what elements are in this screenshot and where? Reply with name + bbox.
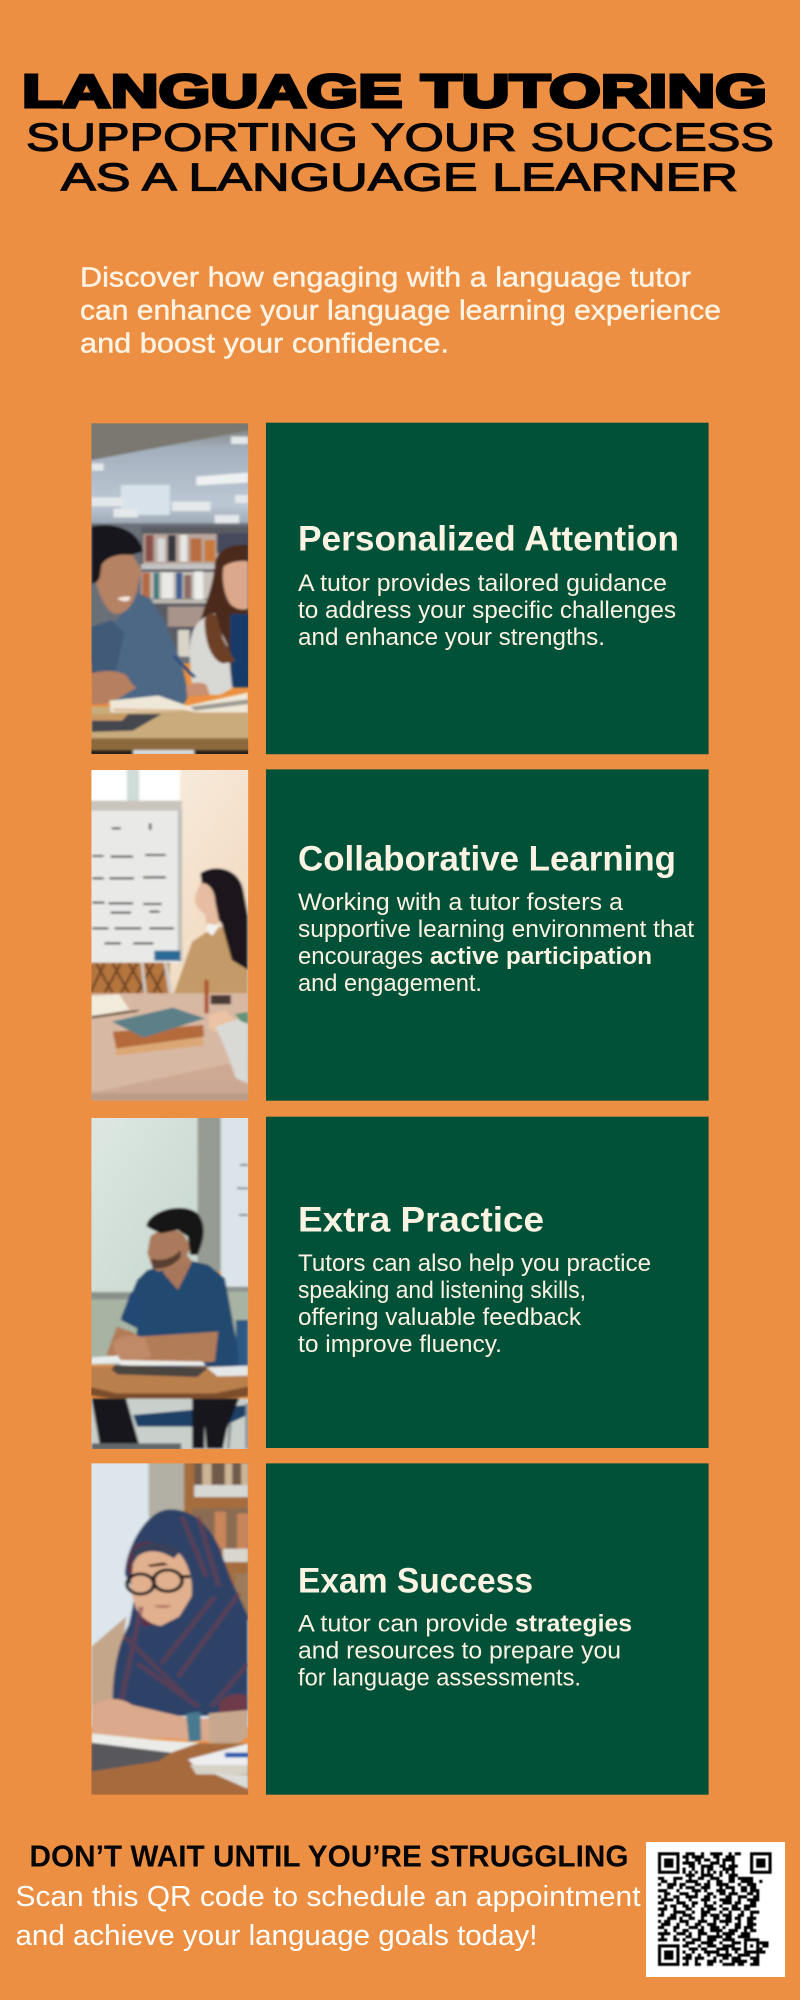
woman — [174, 927, 248, 993]
sweater — [91, 1617, 126, 1710]
books — [115, 1035, 204, 1056]
plaid stripes — [121, 1517, 248, 1707]
photo: man at table — [88, 1115, 251, 1450]
body text: A tutor provides tailored guidance — [298, 570, 667, 597]
panel: extra practice — [266, 1117, 709, 1448]
body text: to improve fluency. — [298, 1331, 502, 1358]
intro text — [80, 262, 721, 358]
body text — [298, 1610, 632, 1692]
table — [92, 1364, 248, 1394]
body text: encourages — [298, 943, 423, 970]
body text: and enhance your strengths. — [298, 624, 605, 651]
body text: A tutor can provide — [298, 1610, 508, 1638]
body text: supportive learning environment that — [298, 916, 694, 943]
desk — [88, 1743, 251, 1797]
face — [130, 1547, 192, 1626]
arms — [107, 1327, 219, 1365]
call to action text — [16, 1881, 640, 1952]
under table — [88, 1399, 251, 1450]
photo: woman at whiteboard — [88, 767, 251, 1103]
subtitle: AS A LANGUAGE LEARNER — [61, 156, 738, 200]
body text: and resources to prepare you — [298, 1638, 621, 1664]
body text: strategies — [515, 1610, 632, 1638]
woman — [199, 545, 248, 663]
photo: two students in library — [88, 420, 251, 757]
heading: Collaborative Learning — [298, 840, 676, 878]
intro text: Discover how engaging with a language tutor — [80, 262, 691, 292]
body text — [298, 570, 676, 651]
hand and sleeve — [208, 1010, 234, 1032]
body text — [298, 889, 694, 997]
man — [114, 594, 189, 706]
call to action text: Scan this QR code to schedule an appointment — [16, 1881, 640, 1913]
body text: and engagement. — [298, 970, 482, 997]
QR code — [646, 1842, 785, 1977]
body text: Working with a tutor fosters a — [298, 889, 624, 916]
subtitle: SUPPORTING YOUR SUCCESS — [26, 116, 774, 160]
subtitle — [26, 116, 774, 200]
heading: Extra Practice — [298, 1200, 544, 1240]
call to action heading: DON’T WAIT UNTIL YOU’RE STRUGGLING — [30, 1838, 628, 1874]
body text: offering valuable feedback — [298, 1304, 582, 1331]
hijab — [113, 1509, 248, 1716]
body text — [298, 1250, 651, 1358]
body text: to address your specific challenges — [298, 597, 676, 624]
call to action text: and achieve your language goals today! — [16, 1920, 538, 1952]
table — [88, 707, 251, 740]
body text: Tutors can also help you practice — [298, 1250, 651, 1277]
photo: woman in hijab studying — [88, 1460, 251, 1797]
man — [121, 1260, 239, 1368]
panel: personalized attention — [266, 423, 709, 754]
panel: collaborative learning — [266, 769, 709, 1101]
body text: for language assessments. — [298, 1664, 581, 1692]
intro text: and boost your confidence. — [80, 328, 449, 358]
heading: Personalized Attention — [298, 520, 679, 558]
intro text: can enhance your language learning experience — [80, 294, 721, 326]
body text: active participation — [430, 943, 652, 970]
title: LANGUAGE TUTORING — [22, 65, 767, 117]
hand, watch — [91, 1699, 210, 1742]
table — [88, 993, 251, 1103]
body text: speaking and listening skills, — [298, 1277, 586, 1304]
heading: Exam Success — [298, 1562, 533, 1600]
panel: exam success — [266, 1463, 709, 1795]
